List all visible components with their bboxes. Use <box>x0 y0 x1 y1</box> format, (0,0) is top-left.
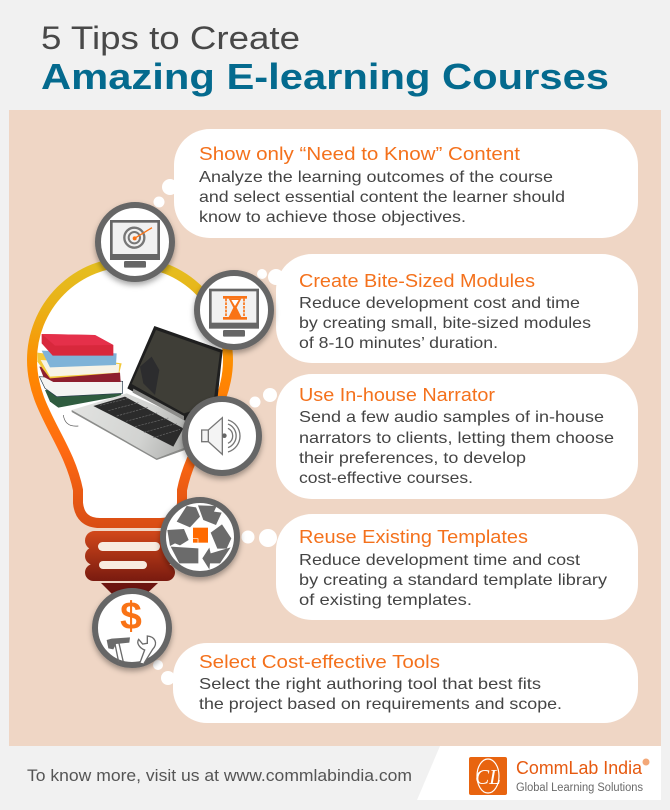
bubble 2: Create Bite-Sized Modules: Create Bite-Sized Modules <box>299 271 535 291</box>
bubble 1: Show only Need to Know Content: and select essential content the learner should <box>199 189 565 206</box>
logo: CommLab India: Global Learning Solutions <box>516 782 643 794</box>
stack of books <box>37 334 123 408</box>
bubble 5: Select Cost-effective Tools: Select the right authoring tool that best fits <box>199 676 541 693</box>
bubble 3: Use In-house Narrator: narrators to clients, letting them choose <box>299 430 614 447</box>
main peach panel <box>9 110 661 746</box>
bubble 3: Use In-house Narrator: cost-effective courses. <box>299 470 473 487</box>
icon: dollar and tools: $ <box>120 595 142 638</box>
bubble 4: Reuse Existing Templates: Reuse Existing Templates <box>299 527 528 547</box>
bubble 1: Show only Need to Know Content <box>154 129 638 238</box>
footer link text: To know more, visit us at www.commlabindia.com <box>27 767 412 785</box>
logo: CommLab India <box>469 757 650 795</box>
icon: recycle <box>163 500 237 574</box>
icon: speaker <box>185 399 259 473</box>
laptop <box>63 326 223 460</box>
bubble 4: Reuse Existing Templates: by creating a standard template library <box>299 572 607 589</box>
logo: CommLab India: CL <box>475 765 501 789</box>
bubble 2: Create Bite-Sized Modules <box>257 254 638 363</box>
bubble 2: Create Bite-Sized Modules: by creating small, bite-sized modules <box>299 315 591 332</box>
bubble 1: Show only Need to Know Content: Show only “Need to Know” Content <box>199 144 520 164</box>
logo: CommLab India: CommLab India <box>516 757 643 778</box>
icon: target on monitor <box>98 205 172 279</box>
icon: hourglass on monitor <box>197 273 271 347</box>
bubble 4: Reuse Existing Templates: of existing templates. <box>299 592 472 609</box>
bulb glass outline <box>32 262 228 523</box>
bubble 3: Use In-house Narrator: Send a few audio samples of in-house <box>299 409 604 426</box>
title: Amazing E-learning Courses <box>41 56 609 97</box>
title <box>41 20 609 97</box>
bubble 4: Reuse Existing Templates: Reduce development time and cost <box>299 552 581 569</box>
bubble 5: Select Cost-effective Tools: the project based on requirements and scope. <box>199 696 562 713</box>
bubble 2: Create Bite-Sized Modules: of 8-10 minutes’ duration. <box>299 335 498 352</box>
footer white logo strip <box>417 746 661 800</box>
bubble 1: Show only Need to Know Content: know to achieve those objectives. <box>199 209 466 226</box>
bubble 5: Select Cost-effective Tools <box>153 643 638 723</box>
bubble 2: Create Bite-Sized Modules: Reduce development cost and time <box>299 295 580 312</box>
bubble 3: Use In-house Narrator: Use In-house Narrator <box>299 385 495 405</box>
icon: dollar and tools <box>95 591 169 665</box>
bubble 1: Show only Need to Know Content: Analyze the learning outcomes of the course <box>199 169 553 186</box>
bubble 4: Reuse Existing Templates <box>242 514 638 620</box>
bulb base <box>85 531 175 600</box>
books and laptop photo <box>37 326 223 460</box>
title: 5 Tips to Create <box>41 20 300 56</box>
lightbulb illustration <box>32 262 228 600</box>
bubble 3: Use In-house Narrator: their preferences, to develop <box>299 450 526 467</box>
bubble 5: Select Cost-effective Tools: Select Cost-effective Tools <box>199 652 440 672</box>
bubble 3: Use In-house Narrator <box>250 374 638 499</box>
